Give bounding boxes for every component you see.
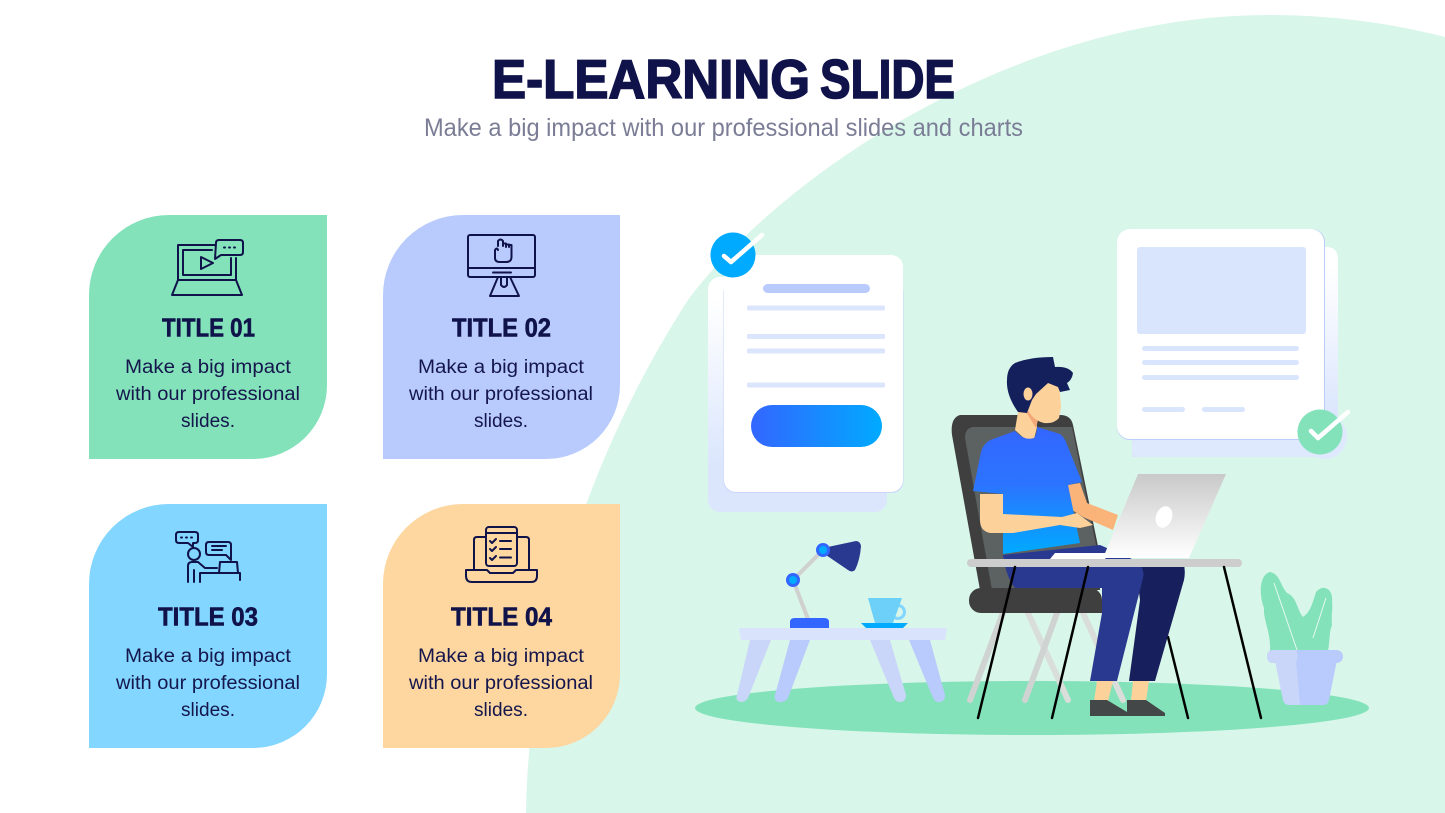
coffee cup [861, 598, 908, 628]
socks [1094, 681, 1149, 701]
illustration: side table [736, 541, 947, 702]
chair legs [970, 613, 1123, 700]
heading: TITLE 03 [158, 602, 258, 632]
body text: Make a big impact [125, 357, 292, 378]
ear [1024, 388, 1032, 400]
icon: monitor with hand cursor [468, 235, 535, 296]
title: SLIDE [820, 48, 955, 110]
icon: green check badge [1298, 410, 1348, 454]
heading: TITLE 01 [162, 312, 255, 342]
plant in pot [1261, 572, 1343, 705]
seat [969, 588, 1102, 613]
desk legs [978, 567, 1261, 718]
body text [408, 357, 593, 432]
body text: slides. [181, 411, 235, 432]
subtitle: Make a big impact with our professional slides and charts [424, 114, 1023, 142]
body text: with our professional [408, 673, 593, 694]
panel: title 03 [89, 504, 327, 748]
icon: blue check badge [710, 232, 762, 278]
body text: slides. [474, 700, 528, 721]
body text [408, 646, 593, 721]
torso shirt [973, 427, 1082, 554]
body text: slides. [181, 700, 235, 721]
chair back [952, 415, 1100, 590]
icon: person at desk with speech bubbles [176, 532, 240, 582]
body text: Make a big impact [125, 646, 292, 667]
body text: Make a big impact [418, 646, 585, 667]
panel: title 02 [383, 215, 620, 459]
hair [1007, 357, 1073, 413]
heading: TITLE 04 [451, 602, 552, 632]
body text: with our professional [115, 384, 300, 405]
title: E-LEARNING [492, 48, 810, 110]
panel: title 04 [383, 504, 620, 748]
background mint shape [526, 15, 1445, 813]
far table leg [1168, 637, 1188, 718]
laptop [1050, 474, 1226, 559]
illustration: document with button [708, 232, 904, 512]
desk top [967, 559, 1242, 567]
panel: title 01 [89, 215, 327, 459]
shoes [1090, 700, 1165, 716]
icon: laptop with checklist [466, 527, 537, 582]
body text: slides. [474, 411, 528, 432]
body text: with our professional [115, 673, 300, 694]
button [751, 405, 882, 447]
body text: with our professional [408, 384, 593, 405]
near arm [980, 494, 1093, 533]
body text [115, 357, 300, 432]
body text [115, 646, 300, 721]
ground ellipse [695, 681, 1369, 735]
illustration: person at laptop [952, 357, 1261, 718]
face [1025, 383, 1061, 423]
neck [1015, 410, 1037, 439]
far arm [1068, 483, 1118, 530]
rear leg [1129, 560, 1185, 681]
illustration: document with image [1117, 229, 1348, 459]
front leg [1003, 545, 1143, 681]
body text: Make a big impact [418, 357, 585, 378]
heading: TITLE 02 [452, 312, 551, 342]
icon: laptop with video and chat [172, 240, 243, 295]
desk lamp [786, 541, 861, 628]
